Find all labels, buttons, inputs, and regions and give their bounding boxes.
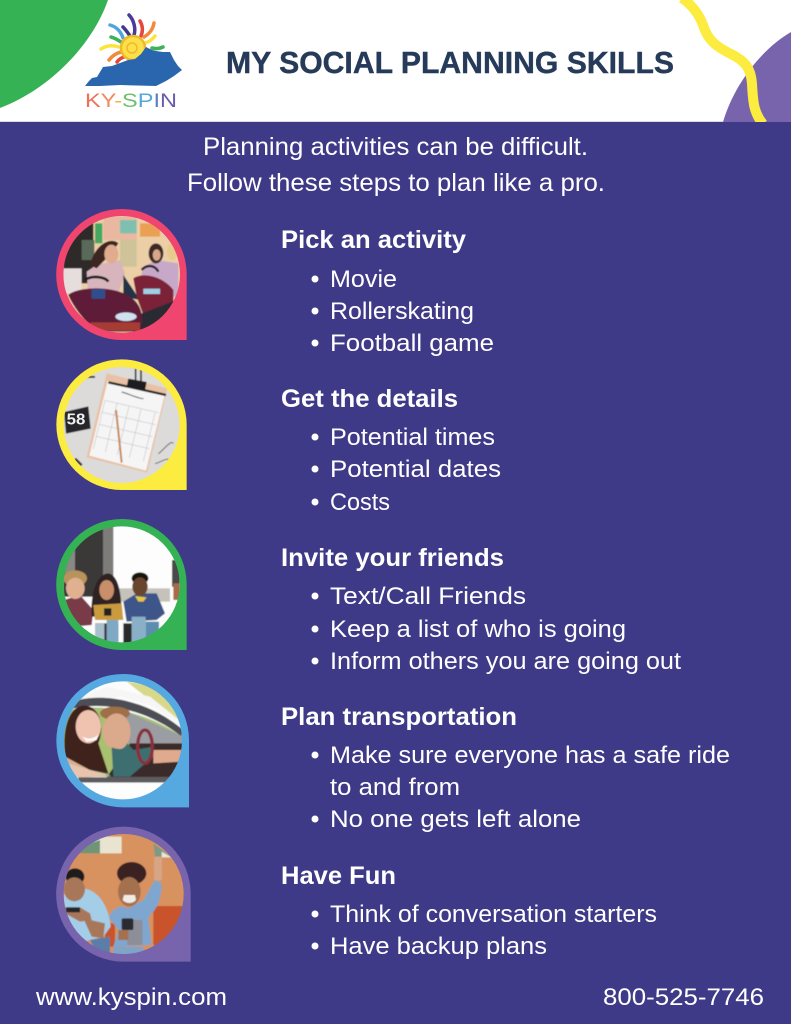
logo sun (121, 36, 145, 60)
list: invite: Inform others you are going out (330, 648, 681, 675)
list: activities: Rollerskating (330, 298, 474, 325)
intro text: Planning activities can be difficult. (203, 133, 588, 161)
header band (0, 0, 791, 124)
list: details: Potential dates (330, 456, 501, 483)
pin 1: bumper cars photo (56, 209, 187, 340)
list: transportation: Make sure everyone has a safe ride (330, 742, 730, 769)
list: invite: Keep a list of who is going (330, 616, 626, 643)
pin 4: car photo (56, 674, 189, 807)
intro text: Follow these steps to plan like a pro. (187, 169, 605, 197)
list: activities (312, 266, 494, 357)
list: activities: Movie (330, 266, 397, 293)
heading: plan transportation: Plan transportation (281, 703, 517, 731)
list: invite: Text/Call Friends (330, 583, 526, 610)
intro text (187, 133, 605, 197)
list: transportation (312, 742, 730, 833)
list: fun (312, 901, 657, 960)
logo sun rays (101, 15, 163, 62)
list: transportation: to and from (330, 774, 460, 801)
step 5 text (281, 862, 657, 960)
heading: get the details: Get the details (281, 385, 458, 413)
list: activities: Football game (330, 330, 494, 357)
step 1 text (281, 226, 494, 357)
heading: invite your friends: Invite your friends (281, 544, 504, 572)
list: details (312, 424, 501, 516)
list: fun: Have backup plans (330, 933, 547, 960)
logo Kentucky silhouette (85, 47, 182, 86)
pin 3: friends photo (56, 519, 187, 650)
step 4 text (281, 703, 730, 833)
pin 5: video game photo (56, 827, 191, 962)
list: transportation: No one gets left alone (330, 806, 581, 833)
purple corner shape (723, 32, 791, 122)
list: details: Costs (330, 489, 390, 516)
footer: phone: 800-525-7746 (603, 984, 764, 1011)
calendar tile number: 58 (67, 411, 85, 428)
list: invite (312, 583, 681, 675)
logo wordmark: KY-SPIN (85, 91, 177, 112)
pin 2: calendar photo (56, 359, 187, 490)
heading: have fun: Have Fun (281, 862, 396, 890)
title: MY SOCIAL PLANNING SKILLS (226, 45, 674, 80)
list: fun: Think of conversation starters (330, 901, 657, 928)
list: details: Potential times (330, 424, 495, 451)
footer: website: www.kyspin.com (35, 984, 227, 1011)
step 3 text (281, 544, 681, 675)
yellow wave (682, 0, 763, 124)
logo: KY-SPIN (85, 15, 182, 112)
step 2 text (281, 385, 501, 516)
green corner shape (0, 0, 108, 108)
heading: pick an activity: Pick an activity (281, 226, 466, 254)
